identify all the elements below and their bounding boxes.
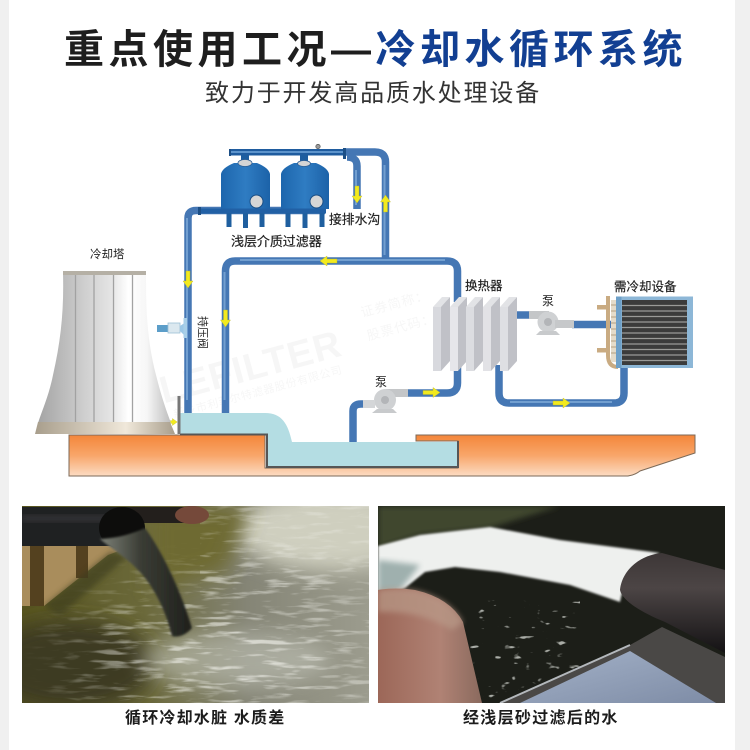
connector stubs (611, 300, 616, 362)
tower rim (63, 271, 146, 275)
foam (36, 550, 369, 703)
tank top caps (238, 160, 252, 166)
left filter tank (221, 163, 270, 209)
water pipes (187, 152, 624, 442)
ground and basin (69, 396, 695, 476)
photo: filtered water (378, 506, 725, 703)
left margin band (0, 0, 9, 750)
cooling tower (35, 271, 175, 434)
cooling unit (597, 296, 693, 368)
mossy bank (378, 506, 560, 548)
label: pump left: 泵 (375, 375, 387, 389)
far-side ripples (200, 506, 369, 596)
tank manholes (250, 195, 263, 208)
caption right: 经浅层砂过滤后的水 (463, 709, 619, 727)
pump right (529, 311, 574, 335)
flow arrows (165, 186, 570, 426)
label: pump right: 泵 (542, 294, 554, 308)
watermark: 证券简称： (359, 287, 431, 320)
pump left (363, 389, 408, 413)
pipe network (188, 152, 624, 442)
orange ground (69, 435, 695, 476)
front pipe (22, 507, 130, 546)
lower-left dark water (22, 612, 159, 703)
tower body (38, 273, 171, 423)
tower base (35, 422, 175, 434)
specular reflections (470, 600, 580, 700)
bright water far side (234, 506, 369, 580)
right margin band (735, 0, 750, 750)
heat exchanger (433, 297, 517, 371)
splash shading (378, 557, 421, 590)
right filter tank (281, 163, 329, 209)
pipe opening (99, 507, 145, 549)
pipe highlights (187, 165, 612, 402)
grey deck (500, 627, 725, 703)
sheet edge (500, 645, 630, 703)
rear pipe (130, 507, 184, 523)
subtitle: 致力于开发高品质水处理设备 (205, 80, 541, 107)
foam centre (140, 632, 330, 688)
caption left: 循环冷却水脏 水质差 (125, 708, 285, 727)
sand filters (198, 144, 346, 228)
dark pipe (620, 553, 725, 653)
plate 5 (500, 297, 517, 371)
discharge stream (100, 528, 192, 637)
pink pipe (378, 588, 482, 703)
label: cooling tower: 冷却塔 (90, 248, 125, 261)
rusty pipe end (175, 506, 209, 524)
watermark: 新乡市利菲尔特滤器股份有限公司 (172, 362, 344, 421)
watermark (152, 287, 443, 423)
label: equipment to be cooled: 需冷却设备 (614, 279, 677, 294)
wooden wall (22, 546, 118, 606)
tower ribs (76, 274, 132, 422)
label: to drain: 接排水沟 (329, 212, 380, 227)
title: 重点使用工况—冷却水循环系统 (64, 28, 687, 72)
copper manifold (608, 296, 618, 367)
tank legs (226, 213, 324, 228)
water basin (180, 413, 457, 466)
tank main pipe (199, 208, 326, 214)
label: pressure valve: 持压阀 (196, 316, 210, 349)
white water sheet (378, 527, 660, 602)
weir wall (178, 396, 180, 434)
olive reflection (150, 506, 250, 590)
watermark: 股票代码： (365, 311, 437, 343)
blue frame (616, 296, 693, 368)
plate 4 (483, 297, 500, 371)
label: shallow media filter: 浅层介质过滤器 (231, 234, 322, 249)
top header pipe (230, 149, 345, 156)
plate 3 (466, 297, 483, 371)
pressure valve (157, 318, 187, 338)
photo: dirty cooling water (22, 506, 369, 703)
blue sheet (520, 651, 716, 703)
label: heat exchanger: 换热器 (465, 279, 503, 293)
tank couplers (241, 155, 249, 161)
wall shadow (44, 552, 128, 616)
process diagram (35, 144, 695, 476)
plate 1 (433, 297, 450, 371)
watermark: LEFILTER (155, 323, 346, 412)
plate 2 (450, 297, 467, 371)
dark fins (622, 300, 687, 365)
gauge (316, 144, 320, 149)
